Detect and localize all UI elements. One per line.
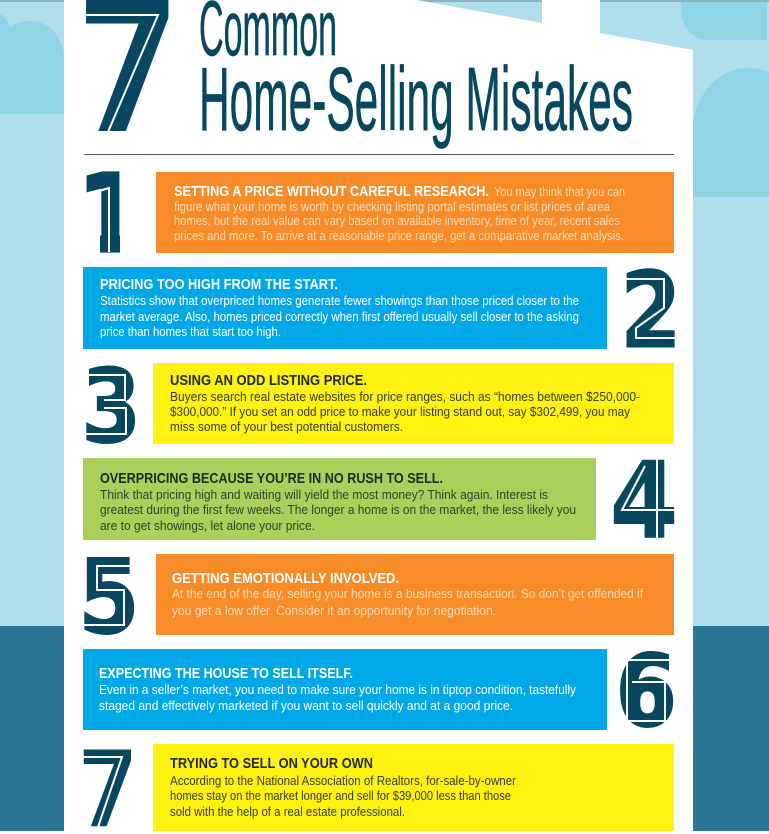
mistake 7 text: homes stay on the market longer and sell for $39,000 less than those [170, 788, 511, 803]
mistake 5 text: you get a low offer. Consider it an opportunity for negotiation. [172, 603, 496, 618]
mistake 1 text: homes, but the real value can vary based on available inventory, time of year, recent sales [174, 213, 620, 228]
background: clouds [0, 2, 769, 197]
mistake 6 text: staged and effectively marketed if you want to sell quickly and at a good price. [99, 698, 513, 713]
numeral 1: 1 [78, 151, 139, 276]
numeral 5: 5 [79, 539, 139, 657]
mistake 4 panel [83, 458, 596, 540]
numeral 6: 6 [616, 634, 677, 748]
mistake 2 text: Statistics show that overpriced homes generate fewer showings than those priced closer to the [100, 293, 579, 308]
numeral 3: 3 [82, 348, 140, 465]
mistake 3 text: Buyers search real estate websites for price ranges, such as “homes between $250,000- [170, 389, 640, 404]
mistake 1 text: SETTING A PRICE WITHOUT CAREFUL RESEARCH. [174, 183, 489, 200]
mistake 4 text: greatest during the first few weeks. The longer a home is on the market, the less likely you [100, 502, 576, 517]
mistake 7 text: sold with the help of a real estate professional. [170, 804, 405, 819]
mistake 7 panel [153, 744, 674, 831]
mistake 7 text: According to the National Association of Realtors, for-sale-by-owner [170, 773, 517, 788]
mistake 1 panel [156, 172, 674, 253]
mistake 4 text: OVERPRICING BECAUSE YOU’RE IN NO RUSH TO SELL. [100, 470, 443, 487]
mistake 2 text: market average. Also, homes priced correctly when first offered usually sell closer to the asking [100, 309, 579, 324]
mistake 1 text: You may think that you can [494, 184, 625, 199]
mistake 4 text: are to get showings, let alone your price. [100, 518, 315, 533]
mistake 2 panel [83, 267, 607, 349]
mistake 6 text: Even in a seller’s market, you need to make sure your home is in tiptop condition, tastefully [99, 682, 576, 697]
mistake 1 text: figure what your home is worth by checking listing portal estimates or list prices of area [174, 199, 611, 214]
mistake 2 text: PRICING TOO HIGH FROM THE START. [100, 276, 338, 293]
mistake 1 text: prices and more. To arrive at a reasonable price range, get a comparative market analysis. [174, 228, 624, 243]
mistake 5 text: At the end of the day, selling your home is a business transaction. So don’t get offended if [172, 586, 643, 601]
mistake 4 text: Think that pricing high and waiting will yield the most money? Think again. Interest is [100, 487, 548, 502]
mistake 3 text: miss some of your best potential customers. [170, 419, 403, 434]
numeral 1 [86, 171, 120, 253]
mistake 3 text: USING AN ODD LISTING PRICE. [170, 372, 367, 389]
mistake 7 text: TRYING TO SELL ON YOUR OWN [170, 755, 373, 772]
mistake 2 text: price than homes that start too high. [100, 324, 281, 339]
mistake 6 panel [83, 649, 607, 730]
mistake 5 text: GETTING EMOTIONALLY INVOLVED. [172, 570, 399, 587]
mistake 6 text: EXPECTING THE HOUSE TO SELL ITSELF. [99, 665, 353, 682]
mistake 5 panel [156, 554, 674, 635]
numeral 4: 4 [611, 441, 677, 561]
mistake 3 panel [153, 363, 674, 444]
title [199, 0, 633, 150]
mistake 3 text: $300,000.” If you set an odd price to make your listing stand out, say $302,499, you may [170, 404, 630, 419]
numeral 2: 2 [621, 252, 681, 371]
